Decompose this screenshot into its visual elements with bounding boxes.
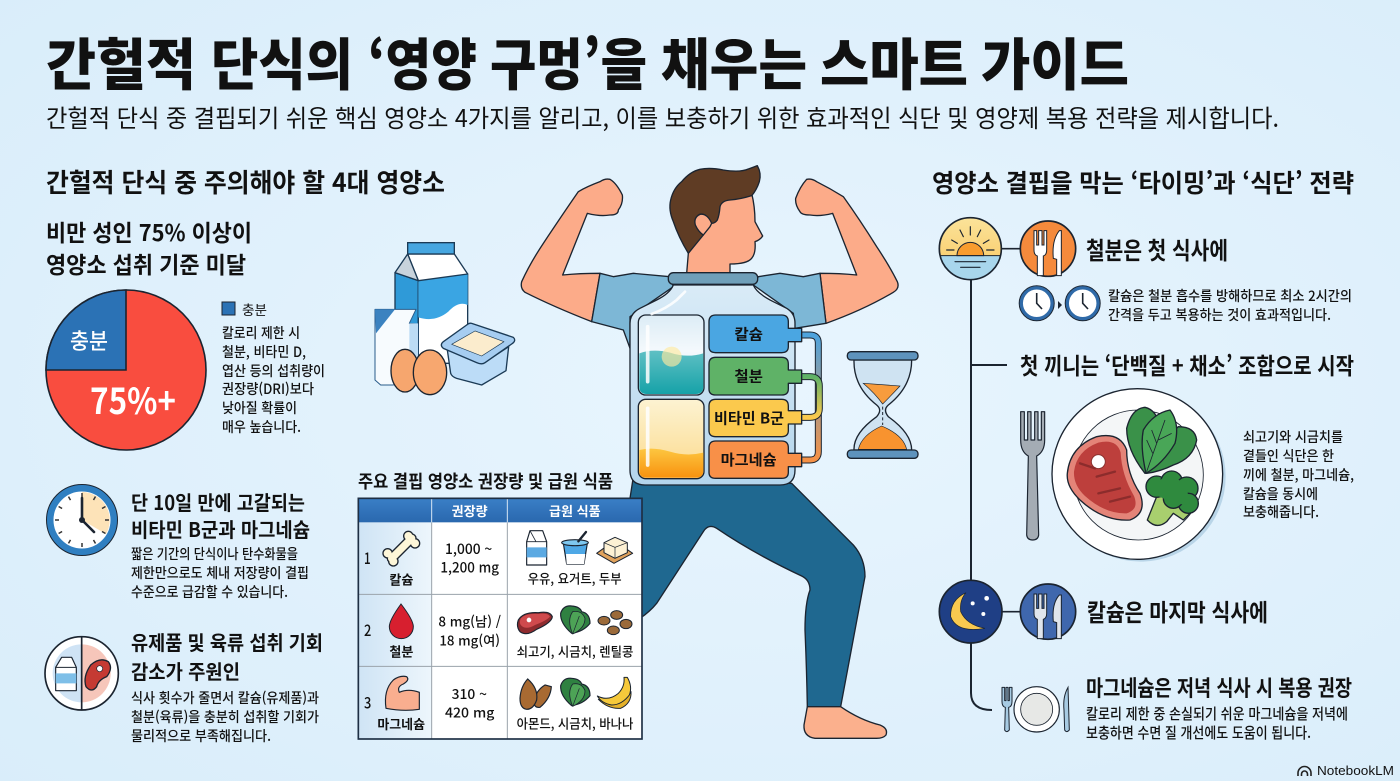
- dairy body text: 물리적으로 부족해집니다.: [131, 726, 271, 746]
- row: iron: 쇠고기, 시금치, 렌틸콩: [517, 642, 633, 661]
- icon: bananas: [597, 677, 631, 708]
- magnesium note: [1086, 703, 1348, 743]
- left panel heading: 간헐적 단식 중 주의해야 할 4대 영양소: [46, 163, 445, 200]
- steak: [1067, 436, 1142, 520]
- title: 채우는: [661, 21, 807, 102]
- title: 스마트: [820, 21, 968, 102]
- row: calcium: 우유, 요거트, 두부: [528, 568, 622, 587]
- plate note: [1243, 427, 1354, 522]
- dairy body text: 식사 횟수가 줄면서 칼슘(유제품)과: [131, 688, 319, 708]
- statistic heading: 영양소 섭취 기준 미달: [46, 246, 246, 280]
- dairy body text: [131, 688, 319, 746]
- row: iron: 철분: [389, 642, 413, 661]
- jar compartments: [638, 292, 704, 479]
- vitamin B body text: 짧은 기간의 단식이나 탄수화물을: [131, 544, 298, 564]
- row: iron: 2: [364, 619, 371, 641]
- timeline line: [971, 278, 992, 710]
- pie chart: 75%+: [90, 373, 176, 425]
- step: magnesium at dinner: [1002, 671, 1352, 743]
- vitamin B body text: [131, 544, 309, 602]
- row: magnesium: 420 mg: [445, 703, 495, 722]
- plate note: 칼슘을 동시에: [1243, 484, 1318, 504]
- plate note: 끼에 철분, 마그네슘,: [1243, 465, 1354, 485]
- nutrient table: [358, 498, 642, 739]
- title: 간헐적: [46, 21, 196, 102]
- icon: steak: [517, 612, 552, 634]
- row: iron: [364, 604, 633, 661]
- label: iron: 철분: [734, 366, 763, 387]
- icon: lentils: [598, 611, 632, 635]
- vitamin B body text: 제한만으로도 체내 저장량이 결핍: [131, 563, 309, 583]
- label: calcium: [709, 315, 802, 353]
- foot: [804, 707, 887, 738]
- icon: clock: [46, 484, 118, 556]
- icon: sunrise: [939, 218, 1020, 280]
- row: calcium: 1,200 mg: [440, 558, 499, 578]
- pie legend and note: 철분, 비타민 D,: [222, 342, 306, 362]
- pie legend and note: 낮아질 확률이: [222, 398, 297, 418]
- icon: two clocks: [1019, 286, 1100, 321]
- panel: vitamin B depletion: [46, 484, 310, 602]
- vitamin B heading: [131, 487, 310, 543]
- icon: flexed arm: [385, 676, 419, 710]
- row: calcium: 칼슘: [389, 569, 413, 588]
- row: magnesium: 아몬드, 시금치, 바나나: [517, 713, 633, 732]
- illustration: hourglass: [847, 352, 918, 458]
- pie legend and note: 권장량(DRI)보다: [222, 379, 314, 399]
- label: vitamin B: [709, 399, 802, 437]
- step: iron at first meal: [939, 218, 1352, 325]
- pants: [607, 477, 865, 707]
- spinach: [1127, 407, 1197, 473]
- pie legend and note: 매우 높습니다.: [222, 417, 301, 437]
- step: protein and vegetables: [971, 347, 1354, 562]
- icon: fork: [1021, 412, 1045, 540]
- magnesium step heading: 마그네슘은 저녁 식사 시 복용 권장: [1086, 671, 1352, 703]
- right panel heading: 영양소 결핍을 막는 ‘타이밍’과 ‘식단’ 전략: [932, 164, 1354, 200]
- connecting tubes: [800, 335, 819, 460]
- dairy heading: [131, 627, 323, 685]
- dairy heading: 유제품 및 육류 섭취 기회: [131, 627, 323, 656]
- dairy heading: 감소가 주원인: [131, 656, 240, 685]
- iron step note: 간격을 두고 복용하는 것이 효과적입니다.: [1108, 305, 1331, 325]
- row: calcium: 1,000 ~: [445, 539, 492, 559]
- row: magnesium: 마그네슘: [377, 714, 425, 733]
- row: magnesium: [364, 676, 633, 733]
- row: iron: 18 mg(여): [439, 630, 500, 649]
- title: 단식의: [211, 21, 353, 102]
- icon: place setting: [1002, 687, 1069, 732]
- statistic heading: 비만 성인 75% 이상이: [46, 214, 252, 248]
- illustration: man upper body and nutrient jar: [521, 166, 918, 485]
- icon: split circle with milk and meat: [45, 637, 118, 710]
- protein step heading: 첫 끼니는 ‘단백질 + 채소’ 조합으로 시작: [1020, 347, 1354, 381]
- row: magnesium: 310 ~: [452, 684, 487, 703]
- subtitle: 간헐적 단식 중 결핍되기 쉬운 핵심 영양소 4가지를 알리고, 이를 보충하기 위한 효과적인 식단 및 영양제 복용 전략을 제시합니다.: [46, 100, 1279, 135]
- broccoli: [1146, 471, 1198, 525]
- table header text: [452, 501, 601, 520]
- icon: tofu: [597, 537, 633, 563]
- icon: spinach: [561, 678, 590, 706]
- vitamin B heading: 단 10일 만에 고갈되는: [131, 487, 305, 516]
- title: [46, 21, 1129, 102]
- row: iron: 8 mg(남) /: [438, 612, 501, 631]
- head: [670, 166, 763, 273]
- table heading: 주요 결핍 영양소 권장량 및 급원 식품: [358, 468, 613, 494]
- vitamin B body text: 수준으로 급감할 수 있습니다.: [131, 582, 288, 602]
- iron step heading: 철분은 첫 식사에: [1086, 231, 1228, 266]
- vitamin B heading: 비타민 B군과 마그네슘: [131, 514, 310, 543]
- plate note: 보충해줍니다.: [1243, 502, 1319, 522]
- panel: 75 percent statistic: [46, 214, 325, 450]
- label: magnesium: 마그네슘: [721, 449, 777, 470]
- table header text: 권장량: [452, 501, 488, 520]
- label: magnesium: [709, 441, 802, 478]
- nutrient jar: [630, 273, 819, 485]
- pie legend and note: 엽산 등의 섭취량이: [222, 361, 325, 381]
- dairy body text: 철분(육류)을 충분히 섭취할 기회가: [131, 707, 319, 727]
- table header text: 급원 식품: [549, 501, 601, 520]
- plate note: 쇠고기와 시금치를: [1243, 427, 1343, 447]
- icon: blood drop: [389, 604, 413, 639]
- pie legend and note: 충분: [242, 299, 267, 319]
- icon: yogurt: [562, 532, 588, 564]
- illustration: man with pants and foot: [607, 477, 887, 738]
- row: calcium: 1: [364, 547, 371, 569]
- title: 구멍’을: [490, 21, 647, 102]
- title: ‘영양: [368, 21, 477, 102]
- iron step note: [1108, 286, 1352, 325]
- illustration: milk, eggs and yogurt: [375, 243, 515, 395]
- panel: dairy and meat reduction: [45, 627, 323, 746]
- row: calcium: [364, 531, 633, 588]
- iron step note: 칼슘은 철분 흡수를 방해하므로 최소 2시간의: [1108, 286, 1352, 306]
- icon: almonds: [520, 679, 551, 709]
- label: calcium: 칼슘: [734, 323, 763, 344]
- pie chart: [46, 290, 206, 450]
- icon: blue cutlery: [1020, 584, 1076, 639]
- statistic heading: [46, 214, 252, 280]
- icon: milk carton: [527, 531, 547, 565]
- pie legend and note: [222, 299, 325, 437]
- label: vitamin B: 비타민 B군: [714, 408, 784, 429]
- arm left: [521, 179, 622, 322]
- pie chart: 충분: [70, 324, 108, 356]
- arm right: [796, 179, 898, 323]
- pie legend and note: 칼로리 제한 시: [222, 323, 300, 343]
- shirt: [592, 273, 826, 348]
- icon: orange cutlery: [1020, 221, 1076, 276]
- magnesium note: 보충하면 수면 질 개선에도 도움이 됩니다.: [1086, 722, 1311, 743]
- label: iron: [709, 357, 802, 395]
- plate note: 곁들인 식단은 한: [1243, 446, 1334, 466]
- title: 가이드: [981, 21, 1129, 102]
- calcium step heading: 칼슘은 마지막 식사에: [1087, 593, 1268, 628]
- NotebookLM badge: NotebookLM: [1317, 763, 1394, 778]
- illustration: plate with steak, spinach and broccoli: [1052, 389, 1226, 562]
- icon: spinach: [561, 606, 590, 634]
- icon: bone: [383, 531, 420, 566]
- icon: moon: [939, 580, 1020, 643]
- step: calcium at last meal: [939, 580, 1268, 643]
- magnesium note: 칼로리 제한 중 손실되기 쉬운 마그네슘을 저녁에: [1086, 703, 1348, 724]
- row: magnesium: 3: [364, 691, 371, 713]
